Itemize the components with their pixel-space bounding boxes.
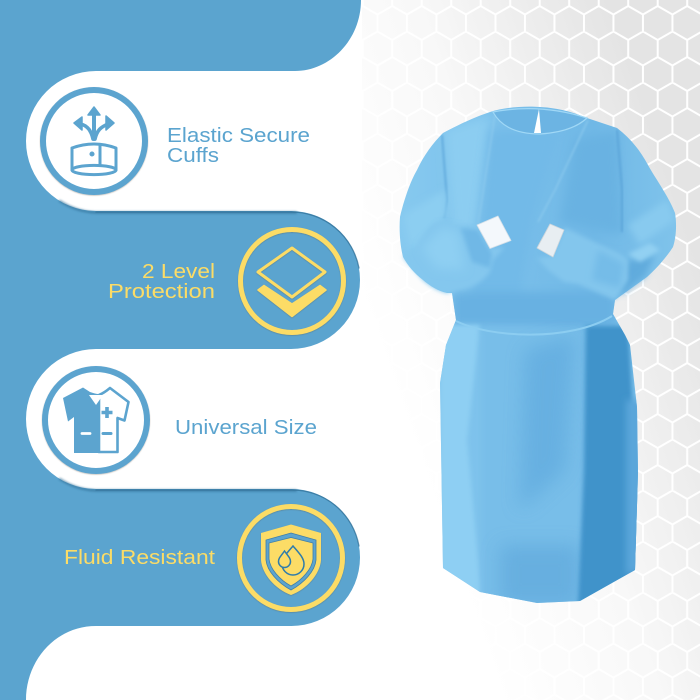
- blue ribbon panel: [0, 0, 361, 700]
- feature: 2 Level Protection: [108, 230, 344, 332]
- label: Fluid Resistant: Fluid Resistant: [64, 547, 215, 569]
- label: Universal Size: Universal Size: [175, 417, 317, 439]
- icon: shield with droplets: [240, 506, 342, 610]
- label: 2 Level Protection: [108, 261, 215, 303]
- label: 2 Level Protection: 2 Level: [142, 261, 215, 283]
- hexagon background: [362, 0, 700, 700]
- gown body with folds: [395, 100, 680, 610]
- left white cuff: [477, 216, 511, 248]
- feature: Fluid Resistant: [64, 506, 342, 610]
- gown waist tie: [456, 316, 612, 335]
- isolation gown: [395, 100, 680, 610]
- label: Elastic Secure Cuffs: [167, 125, 310, 167]
- icon: elastic cuff with arrows: [43, 90, 145, 192]
- feature: Universal Size: [45, 369, 317, 471]
- icon: two layers: [240, 230, 344, 332]
- gown neckline: [493, 109, 587, 134]
- right sleeve cuff: [537, 228, 660, 300]
- label: 2 Level Protection: Protection: [108, 281, 215, 303]
- ribbon edge shadows: [60, 201, 359, 546]
- gown skirt shading: [440, 325, 642, 606]
- feature: Elastic Secure Cuffs: [43, 90, 310, 192]
- gown bodice shading: [403, 115, 675, 326]
- left sleeve cuff: [403, 222, 505, 293]
- icon: scrub shirt: [45, 369, 147, 471]
- right white cuff: [537, 224, 564, 257]
- label: Elastic Secure Cuffs: Elastic Secure: [167, 125, 310, 147]
- label: Elastic Secure Cuffs: Cuffs: [167, 145, 219, 167]
